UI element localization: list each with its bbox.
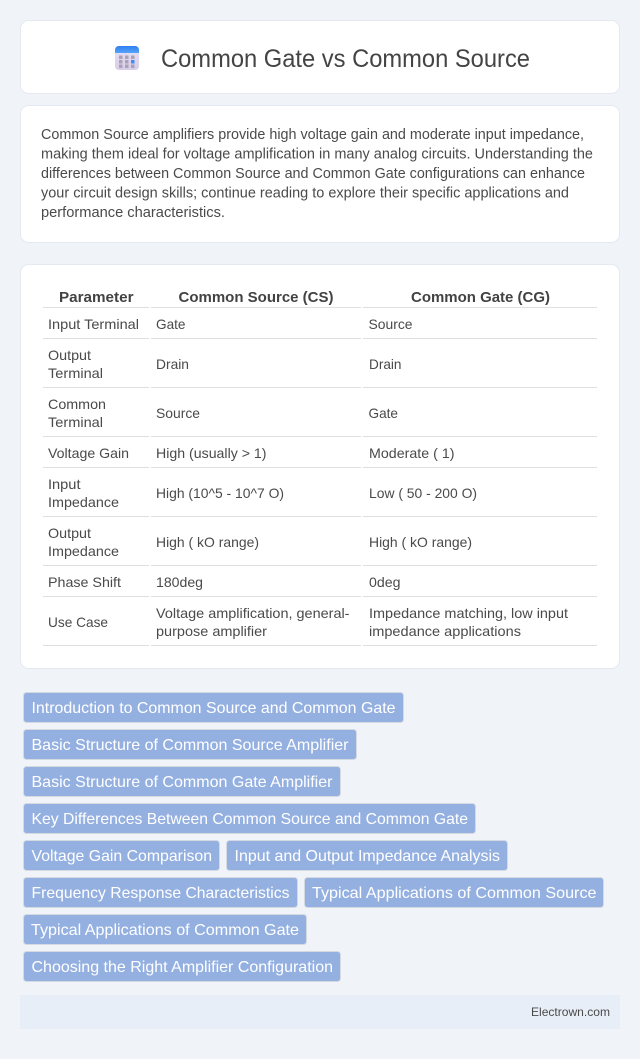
row: output terminal: Terminal: [48, 365, 103, 381]
text block: introduction: [41, 126, 593, 221]
text block: introduction: making them ideal for voltage amplification in many analog circuits. Understanding the: [41, 146, 593, 162]
row: input terminal: Source: [368, 316, 413, 332]
row: use case: [48, 605, 568, 639]
tag: common source structure: [24, 730, 356, 760]
row: voltage gain: Moderate ( 1): [369, 445, 454, 461]
row: phase shift: 180deg: [156, 574, 203, 590]
row: common terminal: Common: [48, 396, 106, 412]
table header row: [59, 289, 550, 306]
row: output impedance: [48, 525, 472, 559]
tag: common gate structure: [24, 766, 340, 796]
row: phase shift: [48, 574, 400, 590]
row: voltage gain: High (usually > 1): [156, 445, 266, 461]
row: use case: Voltage amplification, general-: [156, 605, 350, 621]
footer: [20, 995, 620, 1029]
row: output impedance: Impedance: [48, 543, 119, 559]
panel: header: [20, 20, 620, 94]
row: input impedance: Impedance: [48, 494, 119, 510]
row: output terminal: Drain: [369, 356, 402, 372]
row: output impedance: High ( kO range): [156, 534, 259, 550]
tag: frequency response: Frequency Response Characteristics: [32, 885, 290, 902]
row: input terminal: [48, 316, 413, 332]
tag: common source applications: Typical Applications of Common Source: [312, 885, 597, 902]
tag: choosing configuration: Choosing the Right Amplifier Configuration: [32, 959, 333, 976]
tag: choosing configuration: [24, 952, 340, 982]
row: phase shift: Phase Shift: [48, 574, 121, 590]
row: common terminal: Gate: [368, 405, 398, 421]
tag: common gate applications: [24, 914, 306, 944]
tag: introduction: Introduction to Common Source and Common Gate: [32, 700, 396, 717]
row: input impedance: Input: [48, 476, 81, 492]
row: output impedance: Output: [48, 525, 91, 541]
text block: introduction: your circuit design skills; continue reading to explore their specific applications and: [41, 184, 569, 202]
tag: frequency response: [24, 878, 298, 908]
row: output terminal: Output: [48, 347, 91, 363]
title: Common Gate vs Common Source: [161, 45, 530, 73]
tag: impedance analysis: [226, 840, 508, 870]
row: voltage gain: Voltage Gain: [48, 445, 129, 461]
tag: common source structure: Basic Structure of Common Source Amplifier: [32, 737, 349, 754]
tag: common gate applications: Typical Applications of Common Gate: [31, 922, 299, 939]
table header row: Parameter: [59, 289, 134, 306]
row: input terminal: Gate: [156, 316, 186, 332]
row: input impedance: High (10^5 - 10^7 O): [156, 485, 284, 501]
tag: introduction: [24, 692, 404, 722]
row: output terminal: Drain: [156, 356, 189, 372]
row: phase shift: 0deg: [369, 574, 400, 590]
footer credit: Electrown.com: [531, 1005, 610, 1019]
tag: voltage gain comparison: [24, 840, 220, 870]
tag: impedance analysis: Input and Output Impedance Analysis: [234, 848, 500, 865]
table header row: Common Gate (CG): [411, 289, 550, 306]
row: input terminal: Input Terminal: [48, 316, 139, 332]
row: use case: Use Case: [48, 614, 108, 630]
text block: introduction: Common Source amplifiers provide high voltage gain and moderate input impedance,: [41, 126, 584, 143]
tag: common gate structure: Basic Structure of Common Gate Amplifier: [32, 774, 333, 791]
row: common terminal: Terminal: [48, 414, 103, 430]
table header row: Common Source (CS): [178, 289, 334, 306]
tag: key differences: Key Differences Between Common Source and Common Gate: [32, 811, 468, 828]
row: output impedance: High ( kO range): [369, 534, 472, 550]
row: use case: purpose amplifier: [156, 623, 267, 639]
panel: introduction: [20, 106, 620, 242]
panel: comparison table: [20, 264, 620, 668]
row: common terminal: [48, 396, 398, 430]
row: input impedance: Low ( 50 - 200 O): [369, 485, 477, 501]
row: voltage gain: [48, 445, 454, 461]
topic tags: [24, 692, 604, 982]
tag: voltage gain comparison: Voltage Gain Comparison: [32, 848, 212, 865]
row: input impedance: [48, 476, 477, 510]
row: common terminal: Source: [156, 405, 200, 421]
text block: introduction: performance characteristics.: [41, 204, 225, 221]
text block: introduction: differences between Common Source and Common Gate configurations can enhance: [41, 165, 585, 182]
icon: calendar grid: [115, 46, 139, 70]
tag: common source applications: [304, 878, 604, 908]
row: output terminal: [48, 347, 402, 381]
tag: key differences: [24, 804, 476, 834]
row: use case: Impedance matching, low input: [369, 605, 568, 621]
row: use case: impedance applications: [369, 623, 521, 639]
